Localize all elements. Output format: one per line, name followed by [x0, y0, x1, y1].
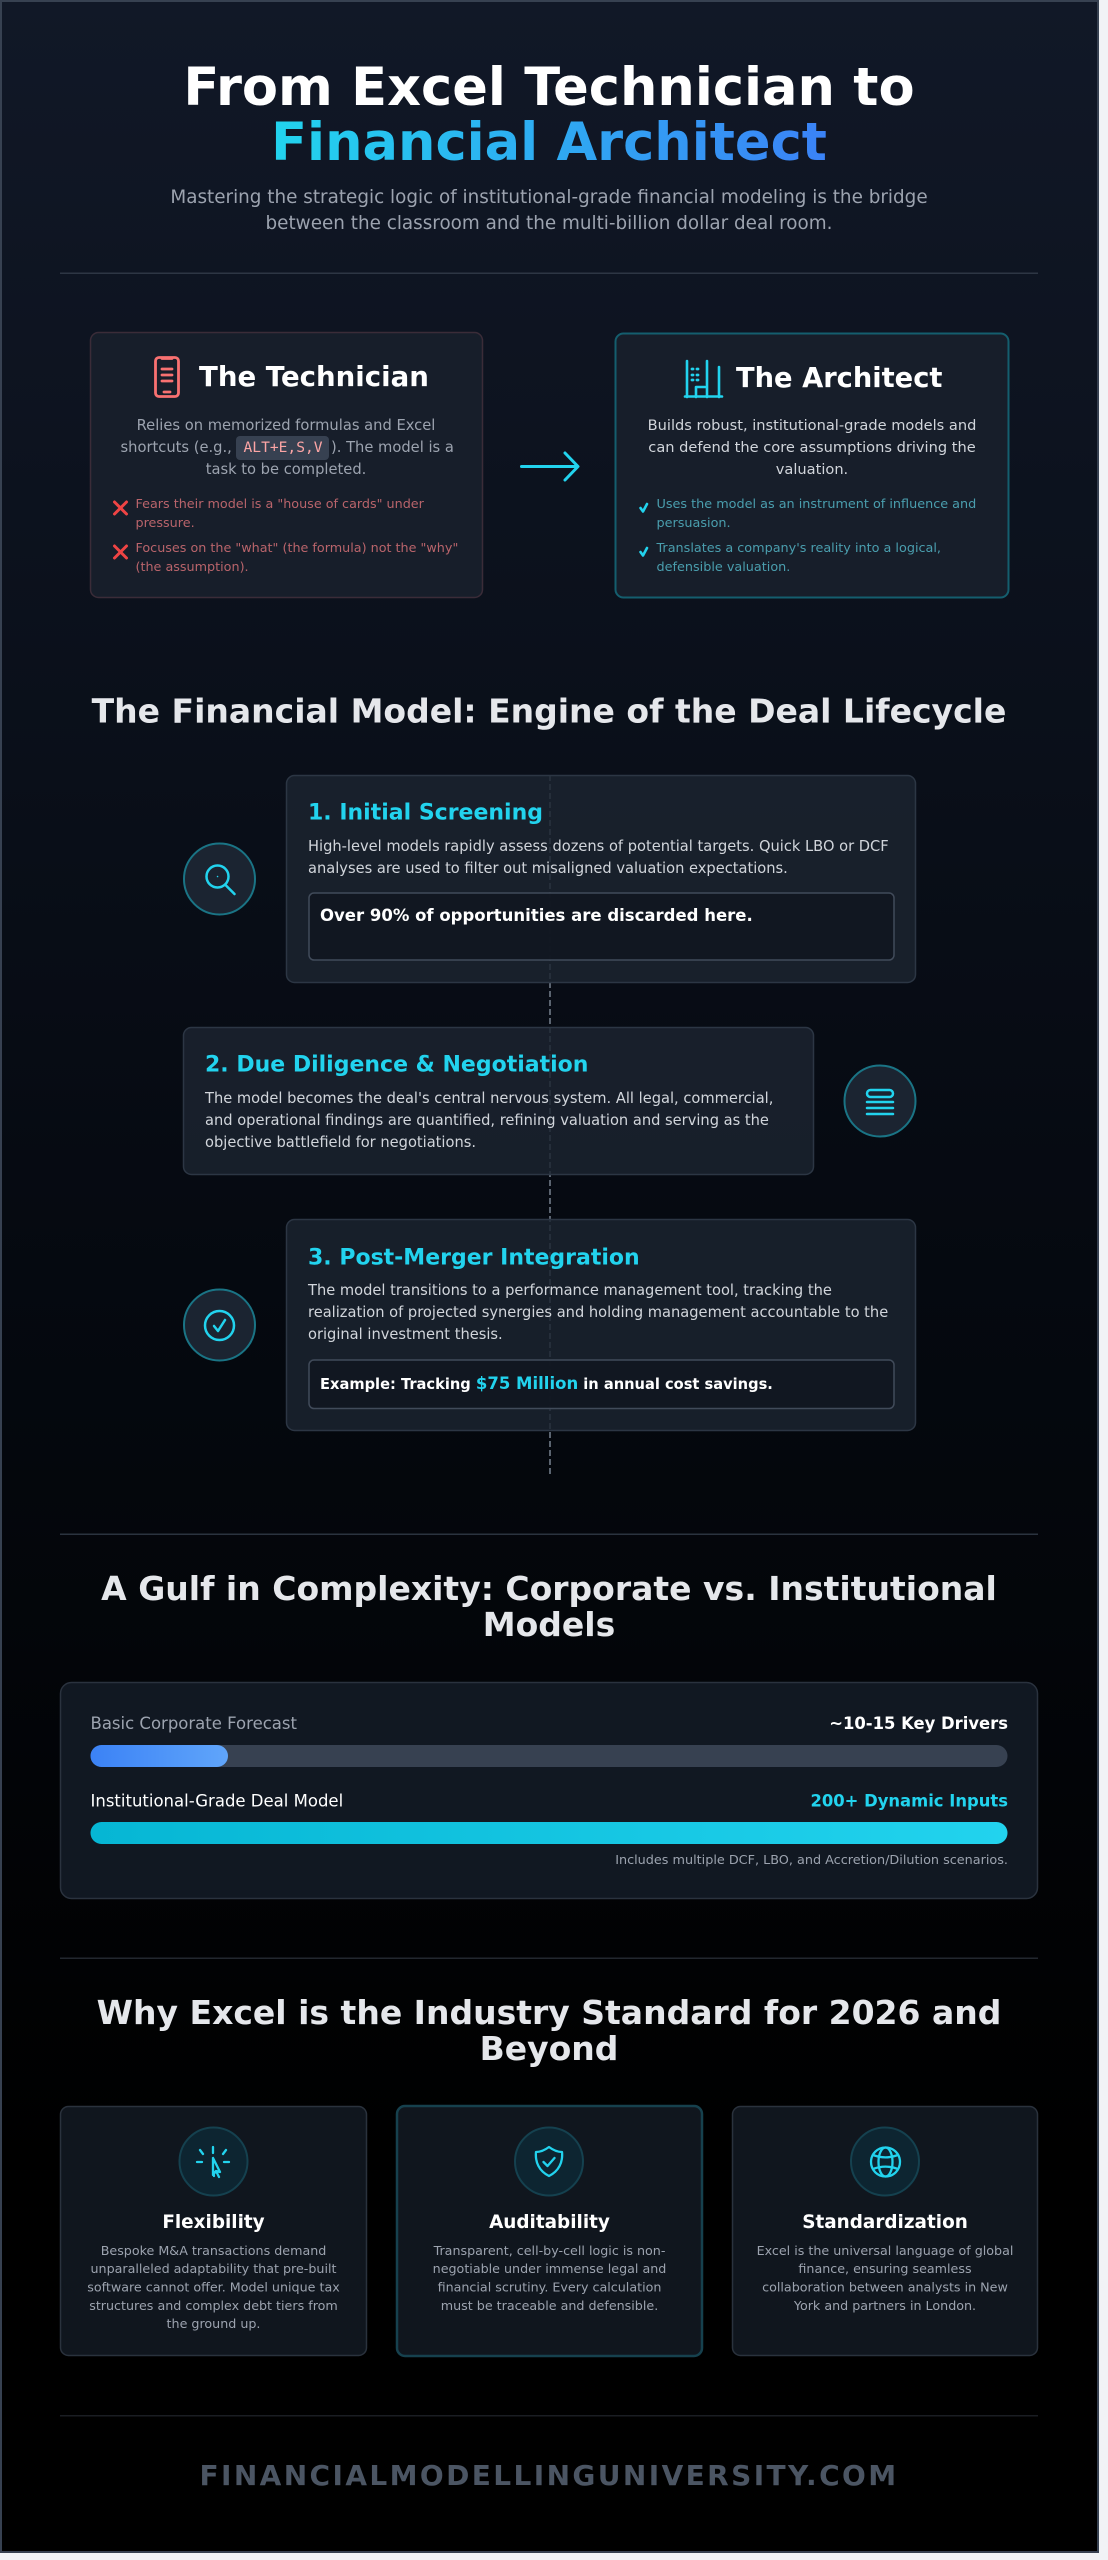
- title: From Excel Technician to: [183, 57, 915, 118]
- icon: cross: [114, 502, 126, 514]
- subtitle: [170, 187, 928, 234]
- architect description: can defend the core assumptions driving the: [648, 439, 976, 456]
- step 2 heading: 2. Due Diligence & Negotiation: [205, 1052, 588, 1078]
- step 3 heading: 3. Post-Merger Integration: [308, 1246, 640, 1270]
- section heading: why excel: Beyond: [480, 2029, 618, 2068]
- step 1 description: [308, 838, 889, 877]
- technician description: Relies on memorized formulas and Excel: [137, 417, 435, 434]
- panel: auditability: [397, 2106, 702, 2356]
- section heading: gulf in complexity: Models: [483, 1605, 615, 1644]
- auditability description: Transparent, cell-by-cell logic is non-: [433, 2243, 665, 2258]
- step 3 description: [307, 1282, 888, 1343]
- standardization description: York and partners in London.: [793, 2298, 976, 2313]
- technician bullet list: Focuses on the "what" (the formula) not the "why": [136, 541, 458, 556]
- subtitle: between the classroom and the multi-billion dollar deal room.: [266, 213, 832, 234]
- step 1 description: High-level models rapidly assess dozens of potential targets. Quick LBO or DCF: [308, 838, 889, 855]
- step 3 description: realization of projected synergies and holding management accountable to the: [308, 1304, 888, 1321]
- step 2 description: The model becomes the deal's central nervous system. All legal, commercial,: [204, 1090, 773, 1107]
- icon: step 3 check circle: [184, 1290, 255, 1360]
- bar: basic corporate forecast: ~10-15 Key Drivers: [829, 1714, 1008, 1733]
- technician description: [120, 417, 454, 478]
- panel: the technician: [90, 332, 482, 598]
- technician bullet list: [114, 497, 458, 575]
- step 1 callout: [309, 893, 894, 960]
- icon: step 2 server stack: [844, 1066, 916, 1136]
- icon: shield check: [515, 2128, 583, 2196]
- standardization description: finance, ensuring seamless: [798, 2261, 972, 2276]
- icon: cursor click: [180, 2128, 248, 2196]
- icon: step 1 magnifier: [184, 844, 255, 914]
- step 3 description: The model transitions to a performance management tool, tracking the: [307, 1282, 832, 1299]
- step 1 description: analyses are used to filter out misaligned valuation expectations.: [308, 860, 788, 877]
- bar: institutional-grade deal model: 200+ Dynamic Inputs: [810, 1792, 1008, 1810]
- architect bullet list: Uses the model as an instrument of influence and: [656, 497, 976, 512]
- icon: cross: [114, 546, 126, 558]
- panel: the architect: [616, 334, 1008, 598]
- step 1 callout: Over 90% of opportunities are discarded here.: [320, 906, 753, 925]
- icon: globe: [851, 2128, 919, 2196]
- architect description: [648, 417, 976, 478]
- subtitle: Mastering the strategic logic of institutional-grade financial modeling is the bridge: [170, 187, 928, 208]
- step 3 description: original investment thesis.: [308, 1326, 503, 1343]
- arrow: [522, 453, 578, 480]
- bar: basic corporate forecast: [90, 1714, 1008, 1767]
- panel: standardization: [732, 2106, 1038, 2356]
- auditability description: negotiable under immense legal and: [433, 2261, 666, 2276]
- technician bullet list: (the assumption).: [136, 560, 249, 575]
- panel: flexibility: [60, 2106, 366, 2356]
- icon: mobile phone: [156, 358, 178, 396]
- step 2 description: and operational findings are quantified, refining valuation and serving as the: [205, 1112, 769, 1129]
- title: Financial Architect: [271, 112, 827, 173]
- flexibility description: [87, 2243, 340, 2331]
- bar: institutional-grade deal model: [90, 1792, 1008, 1844]
- flexibility description: structures and complex debt tiers from: [89, 2298, 338, 2313]
- flexibility description: software cannot offer. Model unique tax: [87, 2280, 340, 2294]
- standardization description: [757, 2243, 1013, 2313]
- flexibility description: unparalleled adaptability that pre-built: [90, 2261, 337, 2276]
- step 2 description: [204, 1090, 773, 1151]
- icon: check: [640, 504, 647, 512]
- title: [183, 57, 915, 173]
- panel: complexity comparison bars: [60, 1682, 1038, 1898]
- technician description: shortcuts (e.g.,: [120, 439, 232, 456]
- technician description: task to be completed.: [206, 461, 366, 478]
- standardization description: collaboration between analysts in New: [762, 2280, 1008, 2294]
- technician description: ). The model is a: [331, 439, 454, 456]
- icon: building: [685, 361, 722, 397]
- flexibility description: the ground up.: [167, 2316, 260, 2331]
- bar: institutional-grade deal model: Institutional-Grade Deal Model: [90, 1792, 343, 1810]
- step 2: due diligence and negotiation: [184, 1028, 814, 1174]
- step 1: initial screening: [286, 776, 916, 982]
- architect description: Builds robust, institutional-grade models and: [648, 417, 976, 434]
- architect bullet list: defensible valuation.: [656, 560, 790, 575]
- step 2 description: objective battlefield for negotiations.: [205, 1134, 476, 1151]
- section heading: deal lifecycle: The Financial Model: Engine of the Deal Lifecycle: [92, 692, 1006, 730]
- auditability description: [433, 2243, 666, 2313]
- technician description: ALT+E,S,V: [244, 439, 323, 456]
- auditability heading: Auditability: [489, 2212, 610, 2233]
- step 3 callout: Example: Tracking $75 Million in annual cost savings.: [320, 1374, 773, 1393]
- auditability description: financial scrutiny. Every calculation: [438, 2280, 661, 2294]
- standardization heading: Standardization: [802, 2212, 968, 2233]
- section heading: gulf in complexity: A Gulf in Complexity: Corporate vs. Institutional: [101, 1569, 997, 1608]
- step 3 callout: [309, 1360, 894, 1408]
- flexibility description: Bespoke M&A transactions demand: [101, 2243, 326, 2258]
- architect bullet list: Translates a company's reality into a logical,: [656, 541, 941, 556]
- bar: basic corporate forecast: Basic Corporate Forecast: [90, 1714, 298, 1733]
- section heading: why excel: [97, 1993, 1001, 2068]
- icon: check: [640, 548, 647, 556]
- technician bullet list: Fears their model is a "house of cards" under: [136, 497, 425, 512]
- step 3: post-merger integration: [286, 1220, 916, 1430]
- flexibility heading: Flexibility: [162, 2212, 265, 2233]
- architect description: valuation.: [776, 461, 848, 478]
- architect heading: The Architect: [736, 363, 942, 394]
- section heading: why excel: Why Excel is the Industry Standard for 2026 and: [97, 1993, 1001, 2032]
- architect bullet list: [640, 497, 976, 575]
- step 1 heading: 1. Initial Screening: [308, 800, 543, 826]
- technician bullet list: pressure.: [136, 516, 195, 531]
- footer brand: FINANCIALMODELLINGUNIVERSITY.COM: [199, 2459, 899, 2492]
- architect bullet list: persuasion.: [656, 516, 731, 531]
- bar footnote: Includes multiple DCF, LBO, and Accretion/Dilution scenarios.: [615, 1853, 1008, 1868]
- section heading: gulf in complexity: [101, 1569, 997, 1644]
- technician heading: The Technician: [199, 360, 429, 393]
- auditability description: must be traceable and defensible.: [441, 2298, 658, 2313]
- standardization description: Excel is the universal language of global: [757, 2243, 1013, 2258]
- timeline dashed line: [549, 775, 551, 1476]
